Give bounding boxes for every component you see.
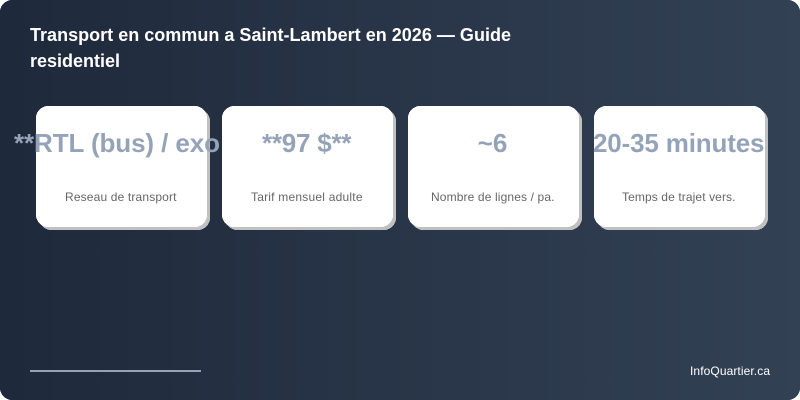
- label: Reseau de transport: [65, 190, 177, 204]
- panel: tarif mensuel: [222, 106, 396, 230]
- card body: [408, 106, 579, 227]
- label: Tarif mensuel adulte: [251, 190, 363, 204]
- value: ~6: [478, 128, 507, 158]
- panel: nombre de lignes: [408, 106, 582, 230]
- title: Transport en commun a Saint-Lambert en 2026 — Guide: [30, 25, 511, 45]
- panel: temps de trajet: [593, 106, 768, 230]
- card body: [36, 106, 207, 227]
- label: Nombre de lignes / pa.: [431, 190, 554, 204]
- title: residentiel: [30, 51, 120, 71]
- value: **RTL (bus) / exo: [14, 128, 220, 158]
- title: [30, 25, 511, 71]
- card body: [222, 106, 393, 227]
- card shadow: [411, 109, 582, 230]
- card shadow: [225, 109, 396, 230]
- value: **97 $**: [262, 128, 352, 158]
- footer brand: InfoQuartier.ca: [690, 364, 770, 378]
- card body: [594, 106, 765, 227]
- card shadow: [39, 109, 210, 230]
- value: 20-35 minutes: [593, 128, 764, 158]
- card shadow: [597, 109, 768, 230]
- label: Temps de trajet vers.: [622, 190, 736, 204]
- footer accent line: [30, 370, 201, 372]
- panel: reseau de transport: [14, 106, 220, 230]
